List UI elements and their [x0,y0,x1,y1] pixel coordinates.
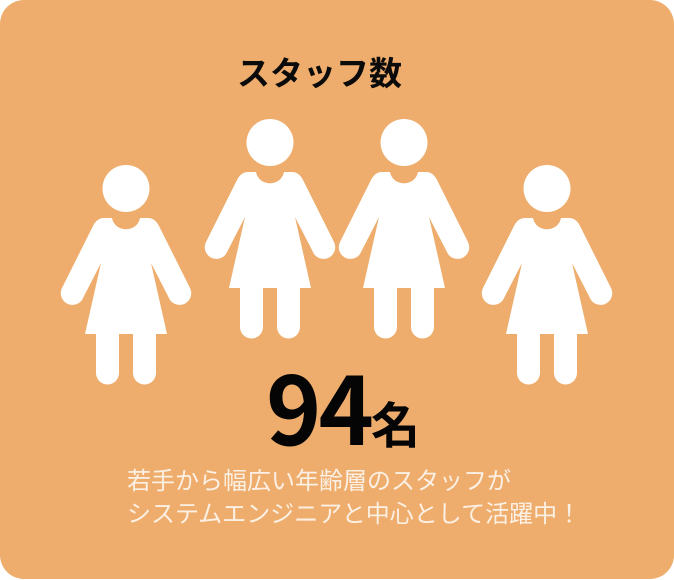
unit label: 名 [371,387,420,458]
icon: person 4 [482,165,612,385]
description line 1: 若手から幅広い年齢層のスタッフが [127,461,511,496]
description line 2: システムエンジニアと中心として活躍中！ [127,494,581,529]
icon: person 3 [339,119,469,339]
icon: person 1 [61,165,191,385]
title: スタッフ数 [237,47,402,95]
icon: person 2 [205,119,335,339]
number: 94: 94 [266,337,371,473]
